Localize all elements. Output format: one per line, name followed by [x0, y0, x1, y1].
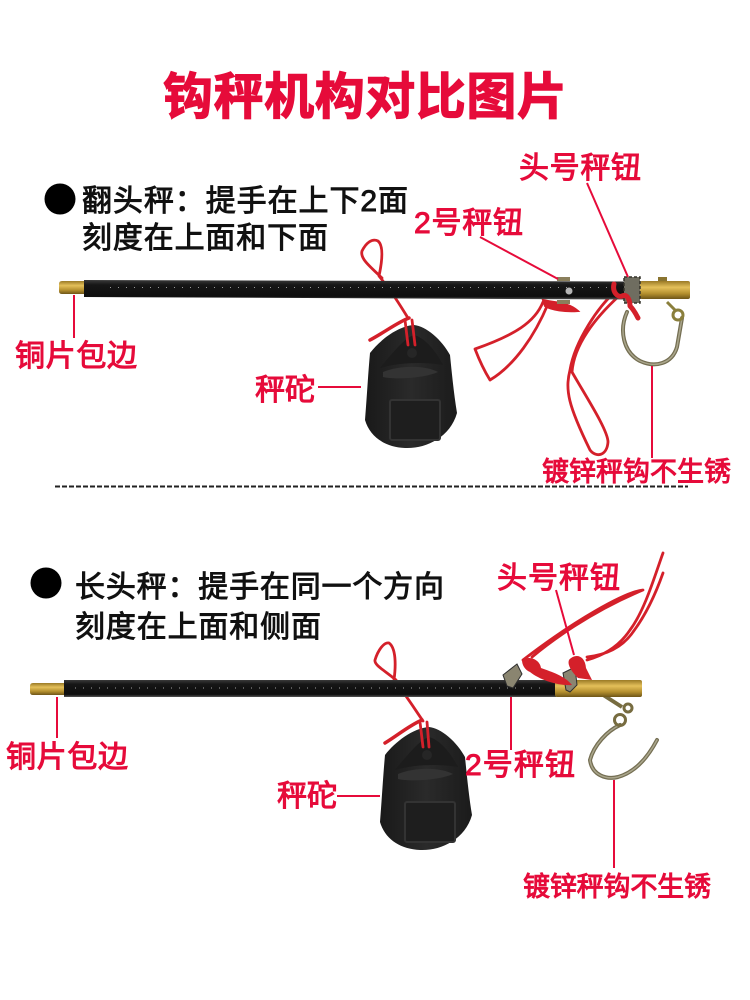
hook: [590, 725, 657, 778]
weight cord: [375, 643, 423, 721]
label: 头号秤钮: [519, 152, 641, 277]
description text: 刻度在上面和下面: [82, 222, 328, 255]
weight: [365, 325, 457, 448]
hook link: [597, 691, 632, 726]
weight cord knot: [370, 318, 415, 345]
label: 镀锌秤钩不生锈: 镀锌秤钩不生锈: [542, 457, 731, 487]
label: 铜片包边: 铜片包边: [15, 340, 137, 373]
scale rod: [30, 680, 642, 697]
weight cord knot: [385, 720, 429, 747]
description text: 刻度在上面和侧面: [75, 611, 321, 644]
hook: [623, 312, 682, 364]
label: 秤砣: 秤砣: [255, 374, 315, 407]
description text: [82, 185, 408, 255]
red cord loops: [522, 553, 663, 685]
red cord loops: [475, 294, 619, 455]
hook knot: [614, 284, 638, 318]
hook link: [667, 302, 683, 320]
label: 2号秤钮: [414, 207, 558, 279]
label: 头号秤钮: 头号秤钮: [519, 152, 641, 185]
label: 铜片包边: [15, 295, 137, 373]
description text: 长头秤：提手在同一个方向: [75, 571, 444, 604]
label: 秤砣: 秤砣: [277, 780, 337, 813]
scale rod: [59, 277, 690, 304]
scale buttons: [503, 664, 577, 692]
label: 秤砣: [277, 780, 380, 813]
label: 镀锌秤钩不生锈: 镀锌秤钩不生锈: [523, 872, 711, 902]
panel: bottom scale (长头秤): [6, 553, 711, 902]
label: 2号秤钮: 2号秤钮: [465, 749, 575, 782]
label: 秤砣: [255, 374, 361, 407]
panel: top scale (翻头秤): [15, 152, 731, 487]
bullet icon: [30, 568, 62, 598]
label: 铜片包边: [6, 697, 128, 774]
weight: [380, 727, 472, 850]
label: 头号秤钮: 头号秤钮: [497, 562, 620, 595]
bullet icon: [44, 184, 76, 214]
weight cord: [362, 240, 408, 318]
description text: 翻头秤：提手在上下2面: [82, 185, 408, 218]
description text: [75, 571, 444, 644]
label: 2号秤钮: 2号秤钮: [414, 207, 523, 240]
label: 头号秤钮: [497, 562, 620, 655]
label: 铜片包边: 铜片包边: [6, 741, 128, 774]
label: 2号秤钮: [465, 697, 575, 782]
title: 钩秤机构对比图片: [163, 69, 567, 125]
